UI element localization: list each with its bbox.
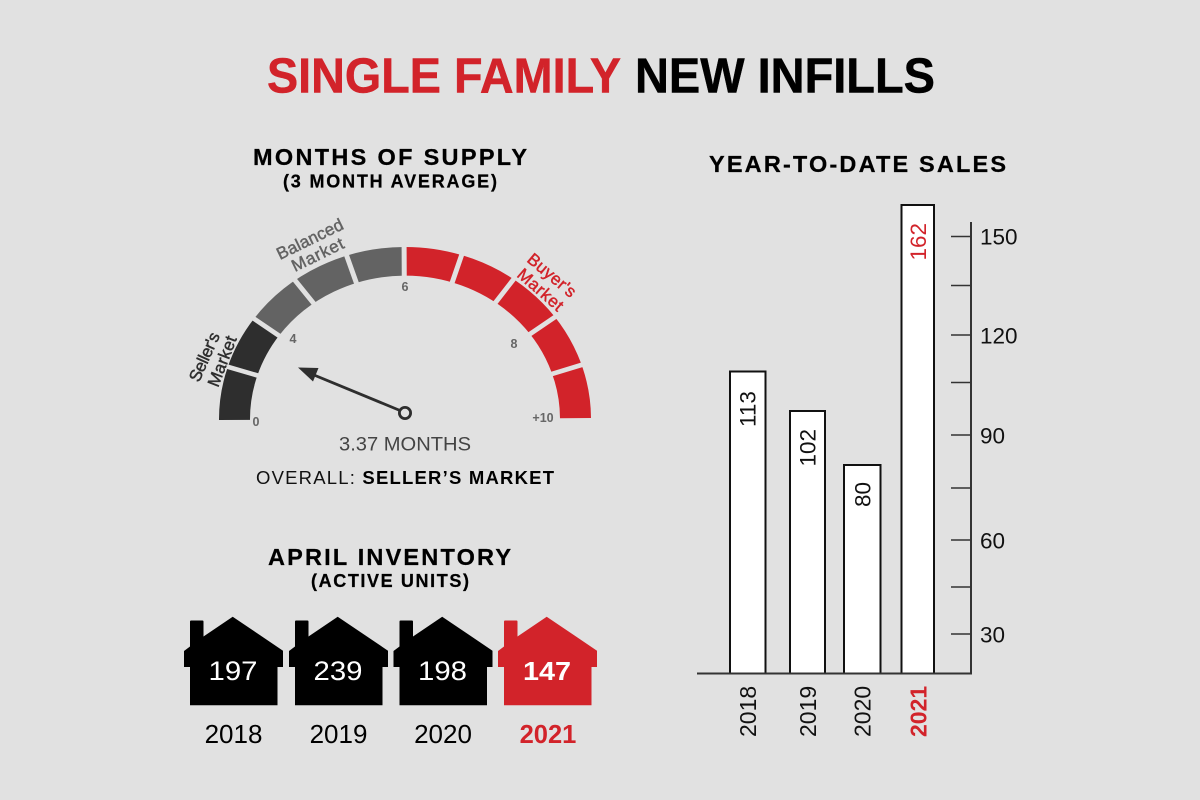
house: 2020: 198	[418, 656, 467, 686]
bar: 2021: 162	[906, 223, 931, 260]
house: 2021: 147	[523, 656, 571, 686]
gauge label: seller's market: Market	[204, 333, 241, 389]
gauge label: buyer's market: Market	[513, 265, 568, 315]
bar chart: year-to-date sales	[697, 205, 1018, 737]
bar: 2019	[790, 411, 825, 737]
gauge label: seller's market: Seller's	[185, 329, 224, 385]
house: 2020	[394, 617, 492, 749]
bar: 2019: 102	[796, 429, 821, 466]
heading: year-to-date sales: YEAR-TO-DATE SALES	[709, 151, 1006, 177]
overall market verdict: OVERALL: SELLER’S MARKET	[256, 467, 555, 488]
house: 2018: 2018	[205, 719, 262, 749]
house: 2019	[289, 617, 388, 749]
gauge label: buyer's market	[513, 250, 580, 315]
house: 2020: 2020	[414, 719, 472, 749]
heading: months of supply	[253, 144, 527, 192]
bar: 2021: 2021	[906, 686, 932, 737]
gauge label: buyer's market: Buyer's	[523, 250, 580, 301]
axis labels: 30	[980, 622, 1005, 648]
gauge scale numbers: 0	[253, 415, 260, 429]
axis labels: 120	[980, 324, 1018, 348]
bar: 2018: 113	[736, 391, 761, 427]
gauge scale numbers: 4	[290, 332, 297, 346]
title	[267, 50, 935, 104]
house: 2021: 2021	[520, 721, 576, 749]
gauge scale numbers: +10	[532, 411, 554, 425]
bar: 2021	[902, 205, 934, 737]
house: 2021	[498, 617, 597, 749]
house: 2018	[184, 617, 283, 749]
axis labels: 90	[980, 424, 1005, 448]
axis labels: 60	[980, 528, 1005, 554]
heading: april inventory	[268, 544, 511, 591]
title: SINGLE FAMILY	[267, 50, 621, 104]
bar: 2020: 80	[851, 482, 876, 507]
gauge scale numbers: 8	[511, 337, 518, 351]
gauge scale numbers	[253, 280, 554, 429]
chart axes	[697, 222, 972, 674]
house: 2018: 197	[208, 656, 258, 686]
bar: 2019: 2019	[795, 686, 821, 737]
gauge needle	[298, 368, 411, 419]
axis labels	[980, 224, 1018, 648]
gauge reading: 3.37 MONTHS	[339, 434, 471, 456]
house: 2019: 239	[314, 656, 362, 686]
bar: 2020	[844, 465, 880, 737]
axis labels: 150	[980, 224, 1018, 250]
heading: months of supply: MONTHS OF SUPPLY	[253, 144, 527, 170]
title: NEW INFILLS	[635, 50, 935, 104]
bar: 2020: 2020	[850, 686, 876, 737]
gauge label: balanced market: Balanced	[273, 215, 346, 264]
gauge scale numbers: 6	[402, 280, 409, 294]
gauge arc segments	[223, 242, 586, 420]
bar: 2018: 2018	[735, 686, 761, 737]
house: 2019: 2019	[310, 719, 367, 749]
bar: 2018	[730, 372, 766, 737]
heading: months of supply: (3 MONTH AVERAGE)	[283, 172, 497, 192]
gauge label: balanced market: Market	[288, 234, 347, 276]
gauge label: seller's market	[185, 329, 241, 389]
heading: april inventory: (ACTIVE UNITS)	[311, 571, 469, 591]
gauge chart	[185, 215, 586, 429]
heading: april inventory: APRIL INVENTORY	[268, 544, 511, 570]
